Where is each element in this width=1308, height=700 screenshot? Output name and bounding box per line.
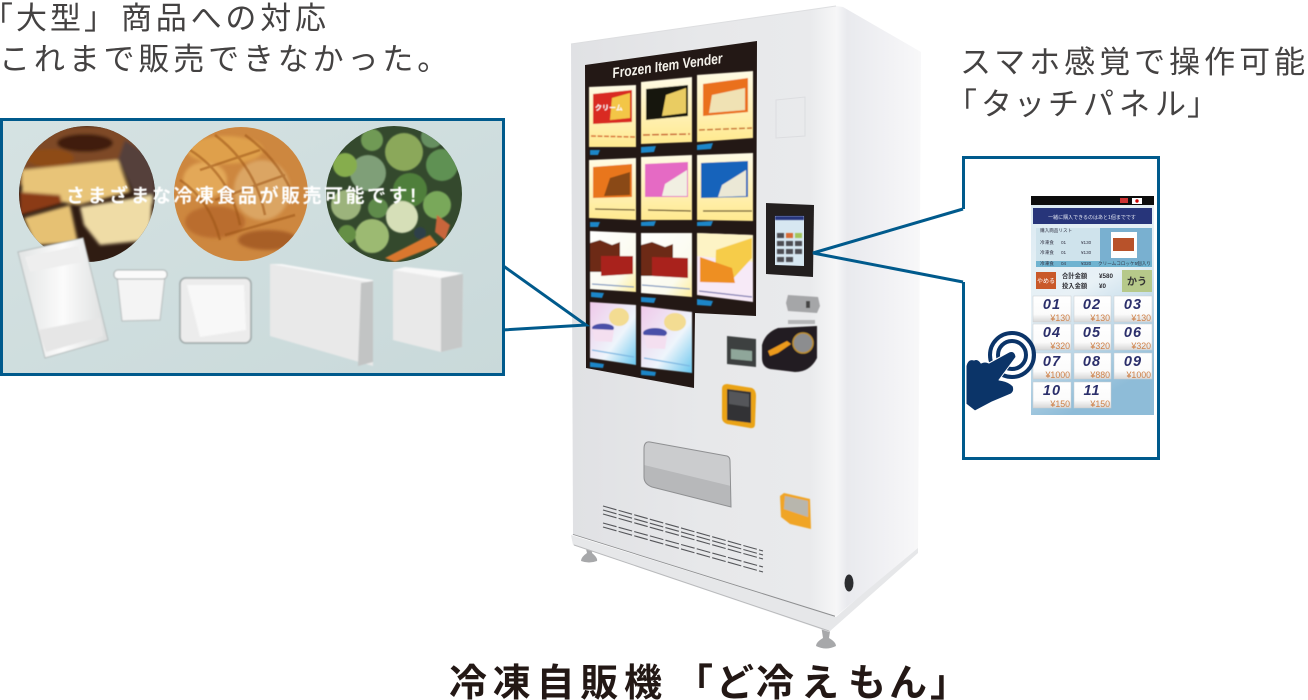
orange flap <box>780 493 811 529</box>
purchase list: 04 <box>1061 261 1067 266</box>
purchase list: 冷凍食 <box>1040 239 1054 246</box>
purchase list: ¥130 <box>1081 250 1092 255</box>
message bar <box>1033 208 1152 224</box>
purchase list: クリームコロッケ5個入り <box>1098 260 1151 267</box>
product buttons: 06 <box>1124 325 1142 341</box>
tile 9 <box>697 233 753 306</box>
totals <box>1062 271 1114 290</box>
product buttons: ¥320 <box>1130 341 1151 351</box>
totals: ¥0 <box>1099 283 1107 290</box>
purchase list <box>1036 227 1152 267</box>
packaging: wide box <box>270 264 373 366</box>
packaging: tray <box>180 278 251 343</box>
food photo: cheesecake <box>19 126 155 262</box>
product buttons: ¥880 <box>1089 370 1110 380</box>
totals: 投入金額 <box>1062 281 1088 290</box>
phone screen: かう <box>1127 276 1147 288</box>
bill slot plate <box>786 295 820 313</box>
heading: touch panel <box>946 45 1308 122</box>
product buttons: ¥320 <box>1089 341 1110 351</box>
side hole <box>844 574 854 592</box>
buy button <box>1122 270 1152 292</box>
product buttons: ¥1000 <box>1045 370 1070 380</box>
product buttons <box>1033 296 1152 409</box>
product buttons: 07 <box>1043 354 1061 370</box>
food photo: grilled chicken <box>174 126 308 262</box>
small status display <box>727 336 756 367</box>
heading: touch panel: スマホ感覚で操作可能 <box>960 45 1308 80</box>
purchase list: ¥130 <box>1081 240 1092 245</box>
product buttons: ¥130 <box>1130 313 1151 323</box>
panel: frozen foods and packaging <box>2 120 504 374</box>
machine front <box>571 6 836 616</box>
panel caption: さまざまな冷凍食品が販売可能です! <box>66 184 419 207</box>
ventilation slots <box>603 506 763 572</box>
packaging: pouch <box>18 238 108 358</box>
product buttons: ¥130 <box>1089 313 1110 323</box>
food photo: frozen vegetables <box>326 126 462 262</box>
product buttons: ¥130 <box>1049 313 1070 323</box>
tile 10 <box>590 302 636 368</box>
heading: large products: これまで販売できなかった。 <box>0 42 452 77</box>
machine base and feet <box>571 534 918 648</box>
tile 8 <box>641 233 692 303</box>
purchase list: 冷凍食 <box>1040 260 1054 267</box>
product buttons: 11 <box>1083 383 1101 399</box>
product tiles <box>589 71 753 376</box>
product buttons: 10 <box>1043 383 1061 399</box>
totals: 合計金額 <box>1062 271 1088 280</box>
heading: large products <box>0 1 452 77</box>
tile 6 <box>697 153 753 226</box>
purchase list: 冷凍食 <box>1040 249 1054 256</box>
product buttons: 01 <box>1043 297 1061 313</box>
totals: ¥580 <box>1099 273 1114 280</box>
card reader <box>722 384 756 428</box>
screen title: Frozen Item Vender <box>611 51 725 82</box>
product buttons: ¥150 <box>1049 399 1070 409</box>
packaging: cup <box>114 270 167 321</box>
icon: tapping hand <box>966 333 1034 411</box>
product buttons: 05 <box>1083 325 1101 341</box>
tile 5 <box>641 155 692 226</box>
pickup door <box>644 442 731 507</box>
product buttons: 03 <box>1124 297 1142 313</box>
connector lines left <box>502 265 586 330</box>
heading: touch panel: 「タッチパネル」 <box>946 87 1218 122</box>
tile 11 <box>641 306 692 376</box>
product buttons: 09 <box>1124 354 1142 370</box>
small touch panel on machine <box>766 203 814 277</box>
tile 2 <box>641 77 692 153</box>
faint panel on door <box>776 97 805 138</box>
tile 1 <box>589 85 636 155</box>
product buttons: 04 <box>1043 325 1061 341</box>
product buttons: 02 <box>1083 297 1101 313</box>
panel: touch screen <box>964 158 1158 458</box>
phone screen: やめる <box>1037 277 1055 285</box>
cancel button <box>1036 272 1056 289</box>
coin unit <box>762 320 817 372</box>
phone screen <box>1031 196 1154 415</box>
touch display screen <box>585 41 757 388</box>
product buttons: ¥1000 <box>1126 370 1151 380</box>
purchase list: 購入商品リスト <box>1040 227 1072 234</box>
connector lines right <box>813 209 963 282</box>
phone screen: 一緒に購入できるのはあと1個までです <box>1048 214 1136 221</box>
vending machine <box>571 6 921 648</box>
packaging: square box <box>393 267 463 352</box>
status bar <box>1031 196 1154 205</box>
product buttons: 08 <box>1083 354 1101 370</box>
purchase list: 01 <box>1061 240 1067 245</box>
tile 1: クリーム <box>595 103 623 112</box>
tile 3 <box>697 71 753 150</box>
tile 4 <box>589 158 636 227</box>
machine side <box>835 6 921 617</box>
purchase list: ¥320 <box>1081 261 1092 266</box>
product buttons: ¥320 <box>1049 341 1070 351</box>
purchase list: 01 <box>1061 250 1067 255</box>
tile 7 <box>590 231 636 298</box>
product buttons: ¥150 <box>1089 399 1110 409</box>
